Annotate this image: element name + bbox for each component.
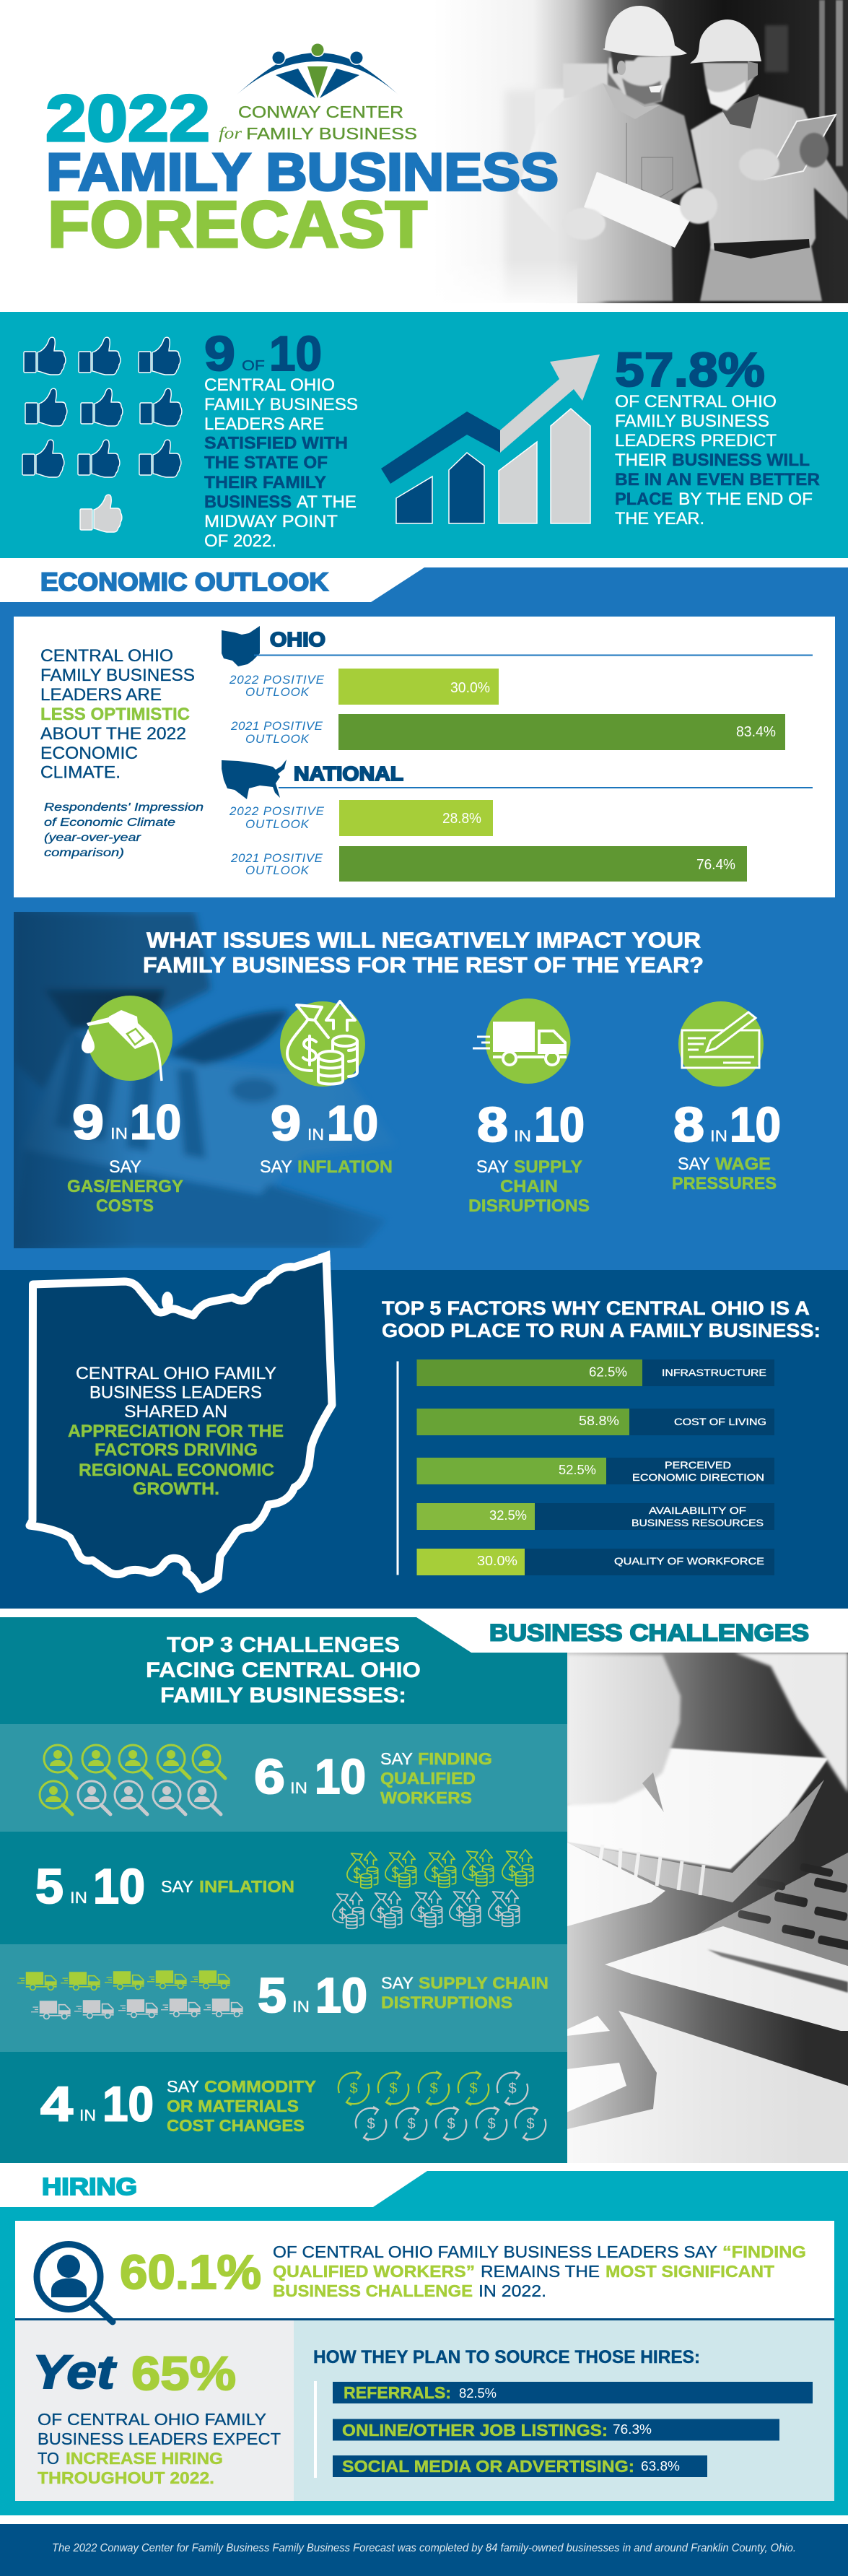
text: less optimistic: [40, 646, 195, 783]
heading: how they plan to source: HOW THEY PLAN TO SOURCE THOSE HIRES:: [313, 2347, 700, 2367]
stat: 5 in 10 supply chain: 5: [258, 1968, 287, 2023]
bar chart: Ohio: OUTLOOK: [245, 732, 310, 746]
stat: 6 in 10: WORKERS: [380, 1788, 472, 1807]
panel: top 5 factors section: [0, 1250, 848, 1609]
bar chart: top 5 factors: 32.5%: [489, 1508, 527, 1523]
text: 57.8% predict better: OF CENTRAL OHIO: [615, 392, 777, 412]
stat: 5 in 10 supply chain: IN: [292, 1998, 310, 2016]
bar chart: hire sources: ONLINE/OTHER JOB LISTINGS:: [342, 2421, 608, 2440]
heading: top 5 factors: GOOD PLACE TO RUN A FAMILY BUSINESS:: [382, 1320, 821, 1341]
stat: 5 in 10 supply chain: SAY: [381, 1974, 414, 1993]
bar chart: top 5 factors: QUALITY OF WORKFORCE: [614, 1555, 764, 1567]
stat: gas/energy costs: COSTS: [96, 1196, 154, 1216]
text: 57.8% predict better: THEIR: [615, 451, 667, 470]
panel: inflation: [35, 1850, 533, 1928]
text: survey note: The 2022 Conway Center for Family Business Family Business Forecast was completed by 84 family-owned businesses in and around Franklin County, Ohio.: [52, 2542, 796, 2554]
stat: inflation: [260, 1096, 393, 1177]
icon: Ohio outline: [30, 1250, 332, 1589]
text: most significant challenge: “FINDING: [722, 2242, 806, 2261]
text: 9 of 10 satisfied: BUSINESS: [204, 492, 292, 512]
heading: top 5 factors: [382, 1297, 821, 1341]
icon: ten money bags: [333, 1850, 533, 1928]
text: 57.8% predict better: BUSINESS WILL: [672, 451, 810, 470]
bar chart: National: 76.4%: [696, 857, 735, 873]
panel: hiring section background: [0, 2171, 848, 2515]
text: 9 of 10 satisfied: [204, 326, 358, 551]
bar chart: top 5 factors: 58.8%: [579, 1414, 619, 1428]
text: less optimistic: ECONOMIC: [40, 744, 138, 763]
stat: supply chain disruptions: 10: [534, 1097, 585, 1152]
stat: 5 in 10 supply chain: DISTRUPTIONS: [381, 1993, 512, 2011]
bar chart: hire sources: 63.8%: [641, 2459, 680, 2473]
text: less optimistic: CLIMATE.: [40, 762, 121, 783]
heading: top 3 challenges: FAMILY BUSINESSES:: [160, 1684, 406, 1707]
stat: 5 in 10 inflation: [35, 1859, 294, 1914]
icon: United States map: [222, 760, 287, 799]
heading: what issues: FAMILY BUSINESS FOR THE REST OF THE YEAR?: [143, 952, 704, 978]
bar chart: National: 28.8%: [442, 811, 481, 827]
stat: 6 in 10: FINDING: [418, 1749, 492, 1768]
stat: supply chain disruptions: SUPPLY: [514, 1157, 582, 1177]
heading: Ohio: OHIO: [270, 628, 325, 650]
text: expect to increase hiring: TO: [38, 2449, 59, 2468]
stat: 6 in 10: [254, 1749, 492, 1807]
heading: what issues: WHAT ISSUES WILL NEGATIVELY IMPACT YOUR: [147, 927, 701, 953]
heading: National: NATIONAL: [294, 762, 403, 785]
icon: growth chart with arrow: [381, 354, 600, 523]
text: 57.8% predict better: THE YEAR.: [615, 509, 704, 528]
stat: wage pressures: IN: [710, 1127, 727, 1145]
text: 57.8% predict better: LEADERS PREDICT: [615, 431, 777, 451]
bar chart: National: [229, 800, 747, 882]
photo: pen, notepad and calculator: [567, 1653, 848, 2163]
bar chart: top 5 factors: 62.5%: [589, 1365, 627, 1379]
text: 9 of 10 satisfied: CENTRAL OHIO: [204, 375, 335, 395]
stat: inflation: 10: [327, 1096, 378, 1151]
bar chart: Ohio: 2021 POSITIVE: [230, 719, 323, 733]
stat: supply chain disruptions: 8: [477, 1097, 508, 1152]
text: regional growth callout: GROWTH.: [133, 1479, 219, 1499]
stat: 5 in 10 supply chain: [258, 1968, 548, 2023]
text: most significant challenge: [273, 2242, 806, 2300]
icon: nine of ten thumbs up: [22, 337, 182, 532]
text: 9 of 10 satisfied: MIDWAY POINT: [204, 512, 338, 531]
text: regional growth callout: CENTRAL OHIO FAMILY: [76, 1364, 276, 1383]
stat: wage pressures: [672, 1097, 781, 1193]
text: less optimistic: FAMILY BUSINESS: [40, 666, 195, 685]
photo: hand holding money: [14, 912, 383, 1248]
icon: delivery truck: [473, 998, 570, 1084]
bar chart: Ohio: 30.0%: [450, 680, 490, 696]
stat: supply chain disruptions: CHAIN: [500, 1177, 558, 1196]
bar chart: National: OUTLOOK: [245, 863, 310, 877]
bar chart: hire sources: 82.5%: [459, 2386, 497, 2401]
text: most significant challenge: OF CENTRAL OHIO FAMILY BUSINESS LEADERS SAY: [273, 2242, 717, 2261]
stat: 4 in 10: COMMODITY: [204, 2077, 316, 2096]
icon: Ohio state: [222, 626, 260, 666]
icon: magnifying glass person: [37, 2244, 113, 2322]
stat: supply chain disruptions: [468, 1097, 590, 1216]
text: expect to increase hiring: OF CENTRAL OHIO FAMILY: [38, 2410, 266, 2429]
heading: what issues: [143, 927, 704, 978]
bar chart: top 5 factors: 52.5%: [559, 1463, 596, 1477]
stat: 6 in 10: QUALIFIED: [380, 1769, 476, 1788]
stat: inflation: 9: [271, 1096, 301, 1151]
text: 57.8% predict better: FAMILY BUSINESS: [615, 412, 769, 431]
stat: supply chain disruptions: IN: [514, 1127, 531, 1145]
heading: hiring: HIRING: [42, 2173, 137, 2200]
stat: inflation: SAY: [260, 1157, 292, 1177]
text: less optimistic: LEADERS ARE: [40, 685, 162, 705]
text: 9 of 10 satisfied: THEIR FAMILY: [204, 473, 326, 492]
bar chart: top 5 factors: ECONOMIC DIRECTION: [632, 1471, 764, 1483]
logo: Conway Center for Family Business: for: [219, 124, 242, 142]
bar chart: hire sources: SOCIAL MEDIA OR ADVERTISING:: [342, 2457, 634, 2476]
stat: 4 in 10: IN: [79, 2107, 96, 2125]
bar chart: Ohio: 2022 POSITIVE: [229, 673, 325, 687]
bar chart: top 5 factors: COST OF LIVING: [674, 1416, 766, 1427]
text: 9 of 10 satisfied: FAMILY BUSINESS: [204, 395, 358, 414]
text: less optimistic: CENTRAL OHIO: [40, 646, 173, 666]
text: 9 of 10 satisfied: SATISFIED WITH: [204, 433, 348, 453]
logo: Conway Center for Family Business: FAMILY BUSINESS: [246, 124, 417, 143]
stat: wage pressures: SAY: [678, 1154, 710, 1174]
text: 9 of 10 satisfied: 10: [269, 326, 322, 381]
text: expect to increase hiring: THROUGHOUT 2022.: [38, 2468, 214, 2487]
text: regional growth callout: REGIONAL ECONOMIC: [79, 1461, 274, 1480]
stat: supply chain disruptions: SAY: [476, 1157, 509, 1177]
text: expect to increase hiring: BUSINESS LEADERS EXPECT: [38, 2429, 281, 2448]
text: regional growth callout: [68, 1364, 284, 1499]
stat: 4 in 10: OR MATERIALS: [167, 2097, 299, 2115]
stat: gas/energy costs: GAS/ENERGY: [67, 1177, 183, 1196]
text: 9 of 10 satisfied: AT THE: [297, 492, 357, 512]
stat: 4 in 10: [40, 2077, 316, 2135]
text: 57.8% predict better: 57.8%: [615, 343, 765, 397]
bar chart: National: 2022 POSITIVE: [229, 804, 325, 818]
icon: ten trucks: [17, 1970, 243, 2019]
text: expect to increase hiring: [38, 2410, 281, 2487]
stat: wage pressures: PRESSURES: [672, 1174, 777, 1193]
bar chart: top 5 factors: PERCEIVED: [665, 1459, 731, 1471]
icon: bank check and pen: [678, 1001, 764, 1087]
stat: 5 in 10 inflation: INFLATION: [199, 1877, 294, 1896]
text: most significant challenge: MOST SIGNIFICANT: [606, 2262, 774, 2281]
text: most significant challenge: QUALIFIED WORKERS”: [273, 2262, 475, 2281]
text: regional growth callout: BUSINESS LEADERS: [89, 1383, 262, 1402]
text: most significant challenge: REMAINS THE: [481, 2262, 600, 2281]
stat: 60.1%: 60.1%: [120, 2245, 261, 2299]
text: most significant challenge: IN 2022.: [478, 2281, 546, 2300]
title: 2022: [45, 82, 210, 155]
text: chart note: Respondents' Impression: [44, 801, 204, 814]
stat: gas/energy costs: [67, 1095, 183, 1216]
text: chart note: comparison): [44, 847, 124, 859]
bar chart: hire sources: [333, 2382, 813, 2477]
stat: gas/energy costs: IN: [110, 1125, 128, 1142]
panel: business challenges background: [0, 1617, 567, 2163]
stat: 5 in 10 inflation: IN: [70, 1889, 87, 1907]
text: 9 of 10 satisfied: THE STATE OF: [204, 453, 328, 472]
title: FAMILY BUSINESS: [46, 143, 559, 202]
text: chart note: (year-over-year: [44, 832, 141, 844]
stat: gas/energy costs: SAY: [109, 1157, 141, 1177]
stat: 4 in 10: 10: [102, 2077, 154, 2132]
panel: finding qualified workers: [0, 1724, 567, 1832]
icon: money bag and coins: [280, 1001, 365, 1087]
stat: 5 in 10 inflation: SAY: [161, 1877, 193, 1896]
bar chart: Ohio: OUTLOOK: [245, 685, 310, 699]
heading: economic outlook: ECONOMIC OUTLOOK: [40, 568, 328, 596]
text: 9 of 10 satisfied: LEADERS ARE: [204, 414, 324, 434]
bar chart: Ohio: 83.4%: [736, 724, 776, 740]
text: less optimistic: ABOUT THE 2022: [40, 724, 186, 744]
text: 57.8% predict better: [615, 343, 820, 528]
logo: Conway Center for Family Business: CONWAY CENTER: [238, 103, 403, 121]
bar chart: hire sources: REFERRALS:: [344, 2383, 451, 2402]
icon: ten dollar cycles: [338, 2071, 546, 2141]
panel: economic outlook section background: [0, 567, 848, 1270]
bar chart: top 5 factors: 30.0%: [477, 1554, 517, 1568]
stat: 5 in 10 supply chain: SUPPLY CHAIN: [419, 1974, 548, 1993]
bar chart: National: OUTLOOK: [245, 817, 310, 831]
bar chart: Ohio: [229, 669, 785, 750]
stat: 5 in 10 inflation: 5: [35, 1859, 64, 1914]
text: regional growth callout: APPRECIATION FOR THE: [68, 1422, 284, 1441]
text: 9 of 10 satisfied: OF 2022.: [204, 531, 276, 551]
stat: supply chain disruptions: DISRUPTIONS: [468, 1196, 590, 1216]
stat: inflation: IN: [307, 1126, 324, 1144]
stat: 4 in 10: SAY: [167, 2077, 199, 2096]
stat: wage pressures: 10: [730, 1097, 781, 1152]
text: chart note: [44, 801, 204, 859]
stat: gas/energy costs: 9: [72, 1095, 104, 1149]
title: FORECAST: [48, 188, 427, 261]
bar chart: top 5 factors: INFRASTRUCTURE: [662, 1367, 766, 1378]
text: chart note: of Economic Climate: [44, 817, 175, 829]
panel: outlook chart card: [14, 617, 835, 897]
heading: top 3 challenges: FACING CENTRAL OHIO: [146, 1658, 421, 1682]
hero photo: two construction workers: [494, 0, 848, 303]
text: 57.8% predict better: PLACE: [615, 489, 673, 509]
text: 57.8% predict better: BY THE END OF: [678, 489, 813, 509]
panel: supply chain: [0, 1944, 567, 2052]
stat: yet 65%: Yet: [32, 2345, 117, 2398]
text: less optimistic: LESS OPTIMISTIC: [40, 705, 190, 724]
heading: top 3 challenges: TOP 3 CHALLENGES: [167, 1633, 400, 1657]
text: regional growth callout: FACTORS DRIVING: [95, 1440, 258, 1460]
icon: ten search people: [40, 1745, 225, 1814]
text: 9 of 10 satisfied: 9: [204, 326, 235, 381]
stat: 4 in 10: COST CHANGES: [167, 2116, 305, 2135]
stat: inflation: INFLATION: [297, 1157, 393, 1177]
panel: negative issues with money photo: [14, 912, 835, 1248]
heading: top 5 factors: TOP 5 FACTORS WHY CENTRAL OHIO IS A: [382, 1297, 810, 1319]
panel: footer: [0, 2524, 848, 2576]
panel: teal satisfaction stats: [0, 312, 848, 558]
bar chart: top 5 factors: [417, 1359, 774, 1575]
bar chart: National: 2021 POSITIVE: [230, 851, 323, 865]
panel: hiring card: [15, 2221, 834, 2501]
text: expect to increase hiring: INCREASE HIRING: [66, 2449, 223, 2468]
heading: top 3 challenges: [146, 1633, 421, 1707]
text: most significant challenge: BUSINESS CHALLENGE: [273, 2281, 473, 2300]
bar chart: top 5 factors: AVAILABILITY OF: [649, 1505, 746, 1516]
stat: 6 in 10: IN: [290, 1779, 307, 1797]
bar chart: top 5 factors: BUSINESS RESOURCES: [631, 1517, 764, 1528]
stat: 6 in 10: 6: [254, 1749, 285, 1804]
text: 57.8% predict better: BE IN AN EVEN BETTER: [615, 470, 820, 489]
stat: 6 in 10: 10: [315, 1749, 366, 1804]
stat: wage pressures: 8: [673, 1097, 704, 1152]
text: regional growth callout: SHARED AN: [124, 1402, 227, 1422]
stat: yet 65%: [32, 2345, 236, 2400]
icon: gas pump nozzle: [82, 996, 172, 1081]
heading: business challenges: BUSINESS CHALLENGES: [489, 1620, 809, 1646]
bar chart: hire sources: 76.3%: [613, 2422, 652, 2437]
stat: 6 in 10: SAY: [380, 1749, 413, 1768]
stat: gas/energy costs: 10: [130, 1095, 181, 1149]
stat: 4 in 10: 4: [40, 2077, 73, 2132]
stat: 5 in 10 inflation: 10: [93, 1859, 145, 1914]
stat: 5 in 10 supply chain: 10: [315, 1968, 367, 2023]
stat: yet 65%: 65%: [131, 2346, 236, 2400]
text: 9 of 10 satisfied: OF: [242, 358, 265, 374]
panel: commodity costs: [40, 2071, 546, 2141]
logo: Conway Center for Family Business: [219, 43, 417, 143]
stat: wage pressures: WAGE: [715, 1154, 771, 1174]
title: [45, 82, 559, 261]
